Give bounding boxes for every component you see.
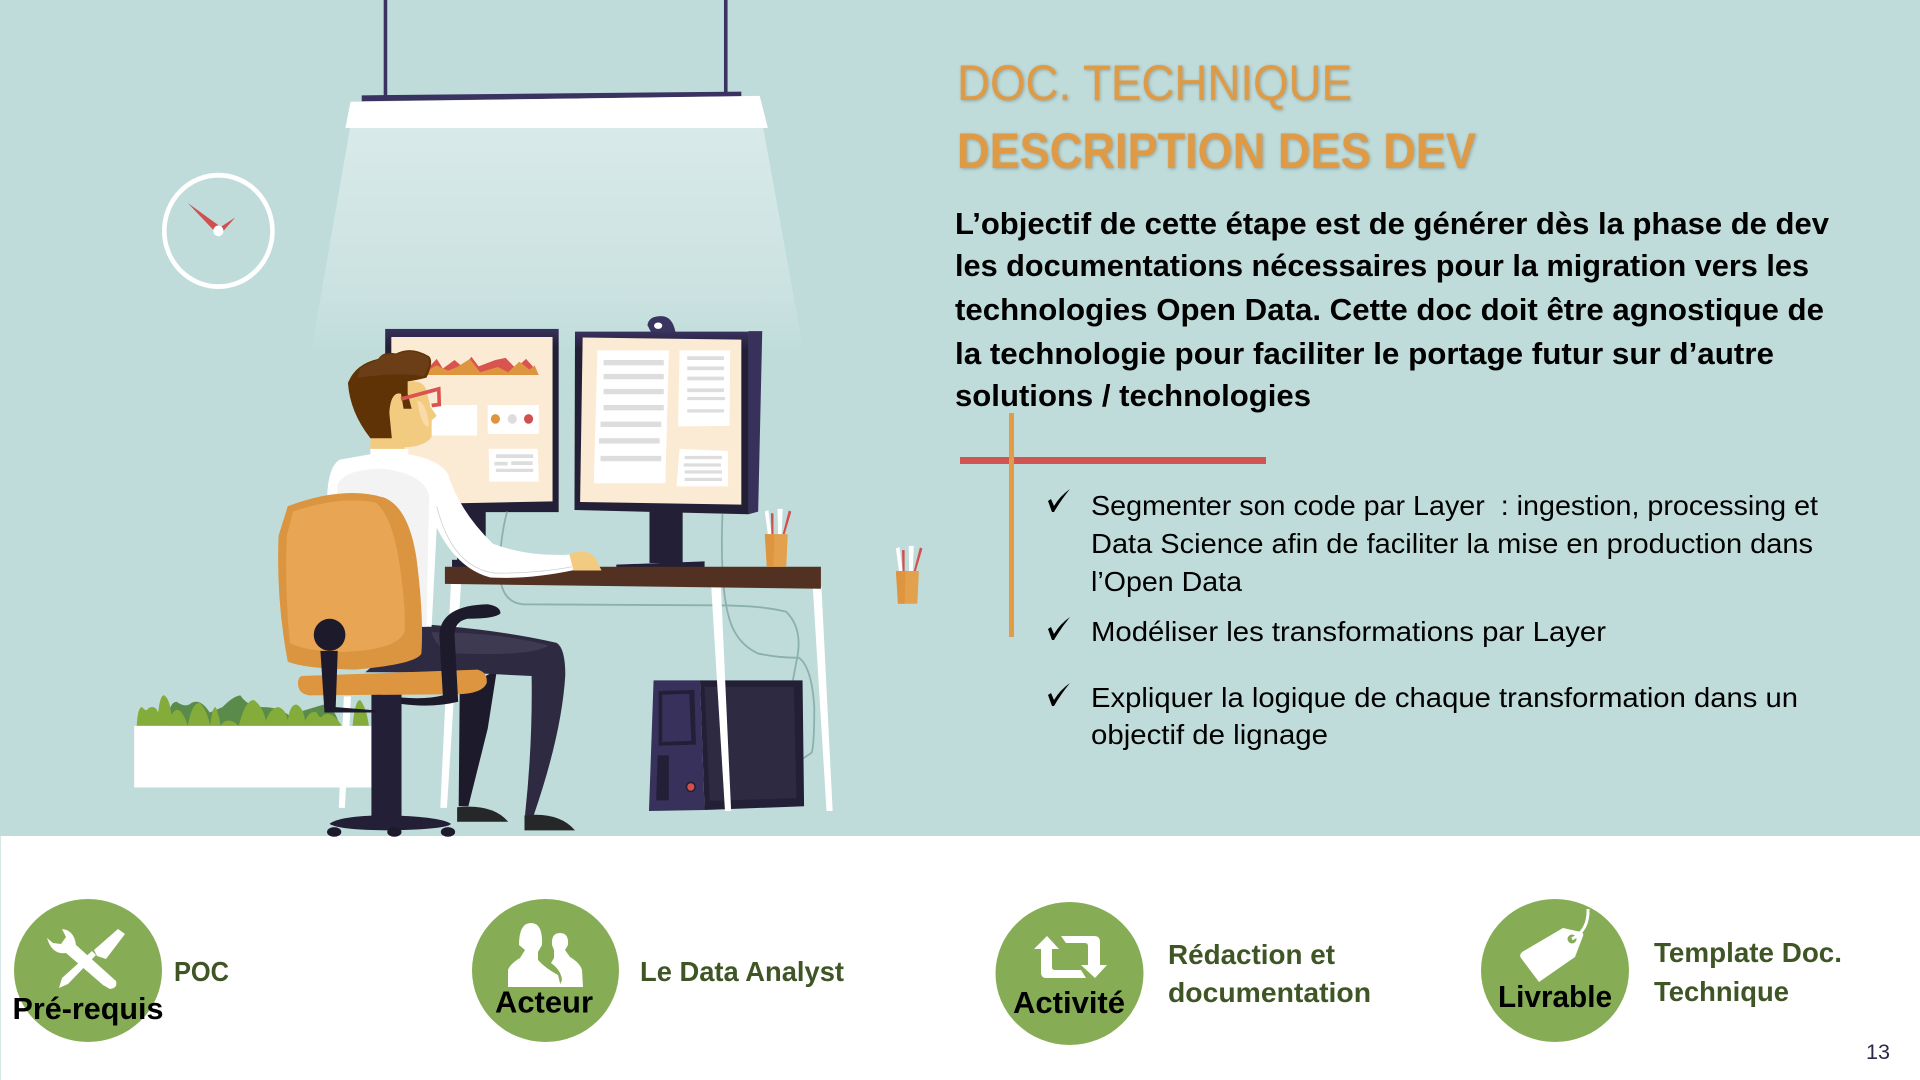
objective paragraph: technologies Open Data. Cette doc doit être agnostique de bbox=[955, 292, 1824, 327]
legs bbox=[365, 624, 575, 830]
value: Template Doc. bbox=[1654, 937, 1842, 968]
head bbox=[348, 350, 439, 456]
title: DESCRIPTION DES DEV bbox=[957, 123, 1477, 179]
title: DOC. TECHNIQUE bbox=[957, 55, 1352, 111]
objective paragraph bbox=[955, 206, 1830, 413]
icon circle: people bbox=[472, 899, 619, 1042]
bullet list bbox=[1048, 489, 1818, 750]
value bbox=[1654, 937, 1842, 1007]
title bbox=[957, 55, 1477, 179]
pencil cup on desk bbox=[765, 509, 791, 567]
value: documentation bbox=[1168, 977, 1371, 1008]
value: Rédaction et bbox=[1168, 939, 1335, 970]
objective paragraph: L’objectif de cette étape est de générer dès la phase de dev bbox=[955, 206, 1830, 241]
icon circle: repeat arrows bbox=[996, 902, 1144, 1045]
objective paragraph: les documentations nécessaires pour la migration vers les bbox=[955, 248, 1809, 283]
backrest support bbox=[320, 651, 376, 712]
value bbox=[1168, 939, 1371, 1008]
bullet 1 bbox=[1091, 490, 1818, 597]
icon circle: tag bbox=[1481, 899, 1629, 1042]
card: pré-requis bbox=[12, 899, 229, 1042]
shirt bbox=[327, 454, 574, 627]
icon: check marks bbox=[1048, 489, 1070, 706]
webcam bbox=[647, 316, 676, 332]
bullet 3: Expliquer la logique de chaque transformation dans un bbox=[1091, 682, 1798, 713]
wall clock bbox=[164, 175, 272, 287]
left monitor bbox=[385, 329, 559, 567]
developer figure bbox=[327, 350, 602, 830]
bullet 3 bbox=[1091, 682, 1798, 750]
label: Acteur bbox=[495, 984, 593, 1020]
background panel bbox=[0, 0, 1920, 836]
bullet 2: Modéliser les transformations par Layer bbox=[1091, 616, 1606, 647]
card: activité bbox=[996, 902, 1371, 1045]
illustration: developer at desk bbox=[134, 0, 922, 837]
icon circle: tools bbox=[14, 899, 162, 1042]
desk bbox=[339, 567, 833, 811]
hand bbox=[569, 552, 602, 571]
planter with plants bbox=[134, 695, 372, 787]
page number: 13 bbox=[1866, 1041, 1890, 1064]
computer tower bbox=[649, 680, 804, 811]
right monitor bbox=[574, 331, 762, 568]
value: Technique bbox=[1654, 976, 1789, 1007]
card: acteur bbox=[472, 899, 844, 1042]
bullet 1: l’Open Data bbox=[1091, 566, 1242, 597]
label: Pré-requis bbox=[12, 991, 164, 1026]
objective paragraph: solutions / technologies bbox=[955, 378, 1311, 413]
ceiling lamp bbox=[312, 0, 803, 348]
accent lines bbox=[960, 413, 1266, 637]
label: Livrable bbox=[1498, 979, 1612, 1014]
armrest bbox=[401, 604, 501, 706]
card: livrable bbox=[1481, 899, 1842, 1042]
bullet 1: Segmenter son code par Layer : ingestion, processing et bbox=[1091, 490, 1818, 521]
value: POC bbox=[174, 956, 229, 987]
office chair bbox=[278, 493, 501, 837]
cables bbox=[499, 512, 814, 759]
bullet 3: objectif de lignage bbox=[1091, 719, 1328, 750]
bullet 1: Data Science afin de faciliter la mise en production dans bbox=[1091, 528, 1813, 559]
value: Le Data Analyst bbox=[640, 956, 844, 987]
label: Activité bbox=[1013, 985, 1125, 1020]
second pencil cup bbox=[896, 546, 922, 604]
objective paragraph: la technologie pour faciliter le portage futur sur d’autre bbox=[955, 336, 1774, 371]
